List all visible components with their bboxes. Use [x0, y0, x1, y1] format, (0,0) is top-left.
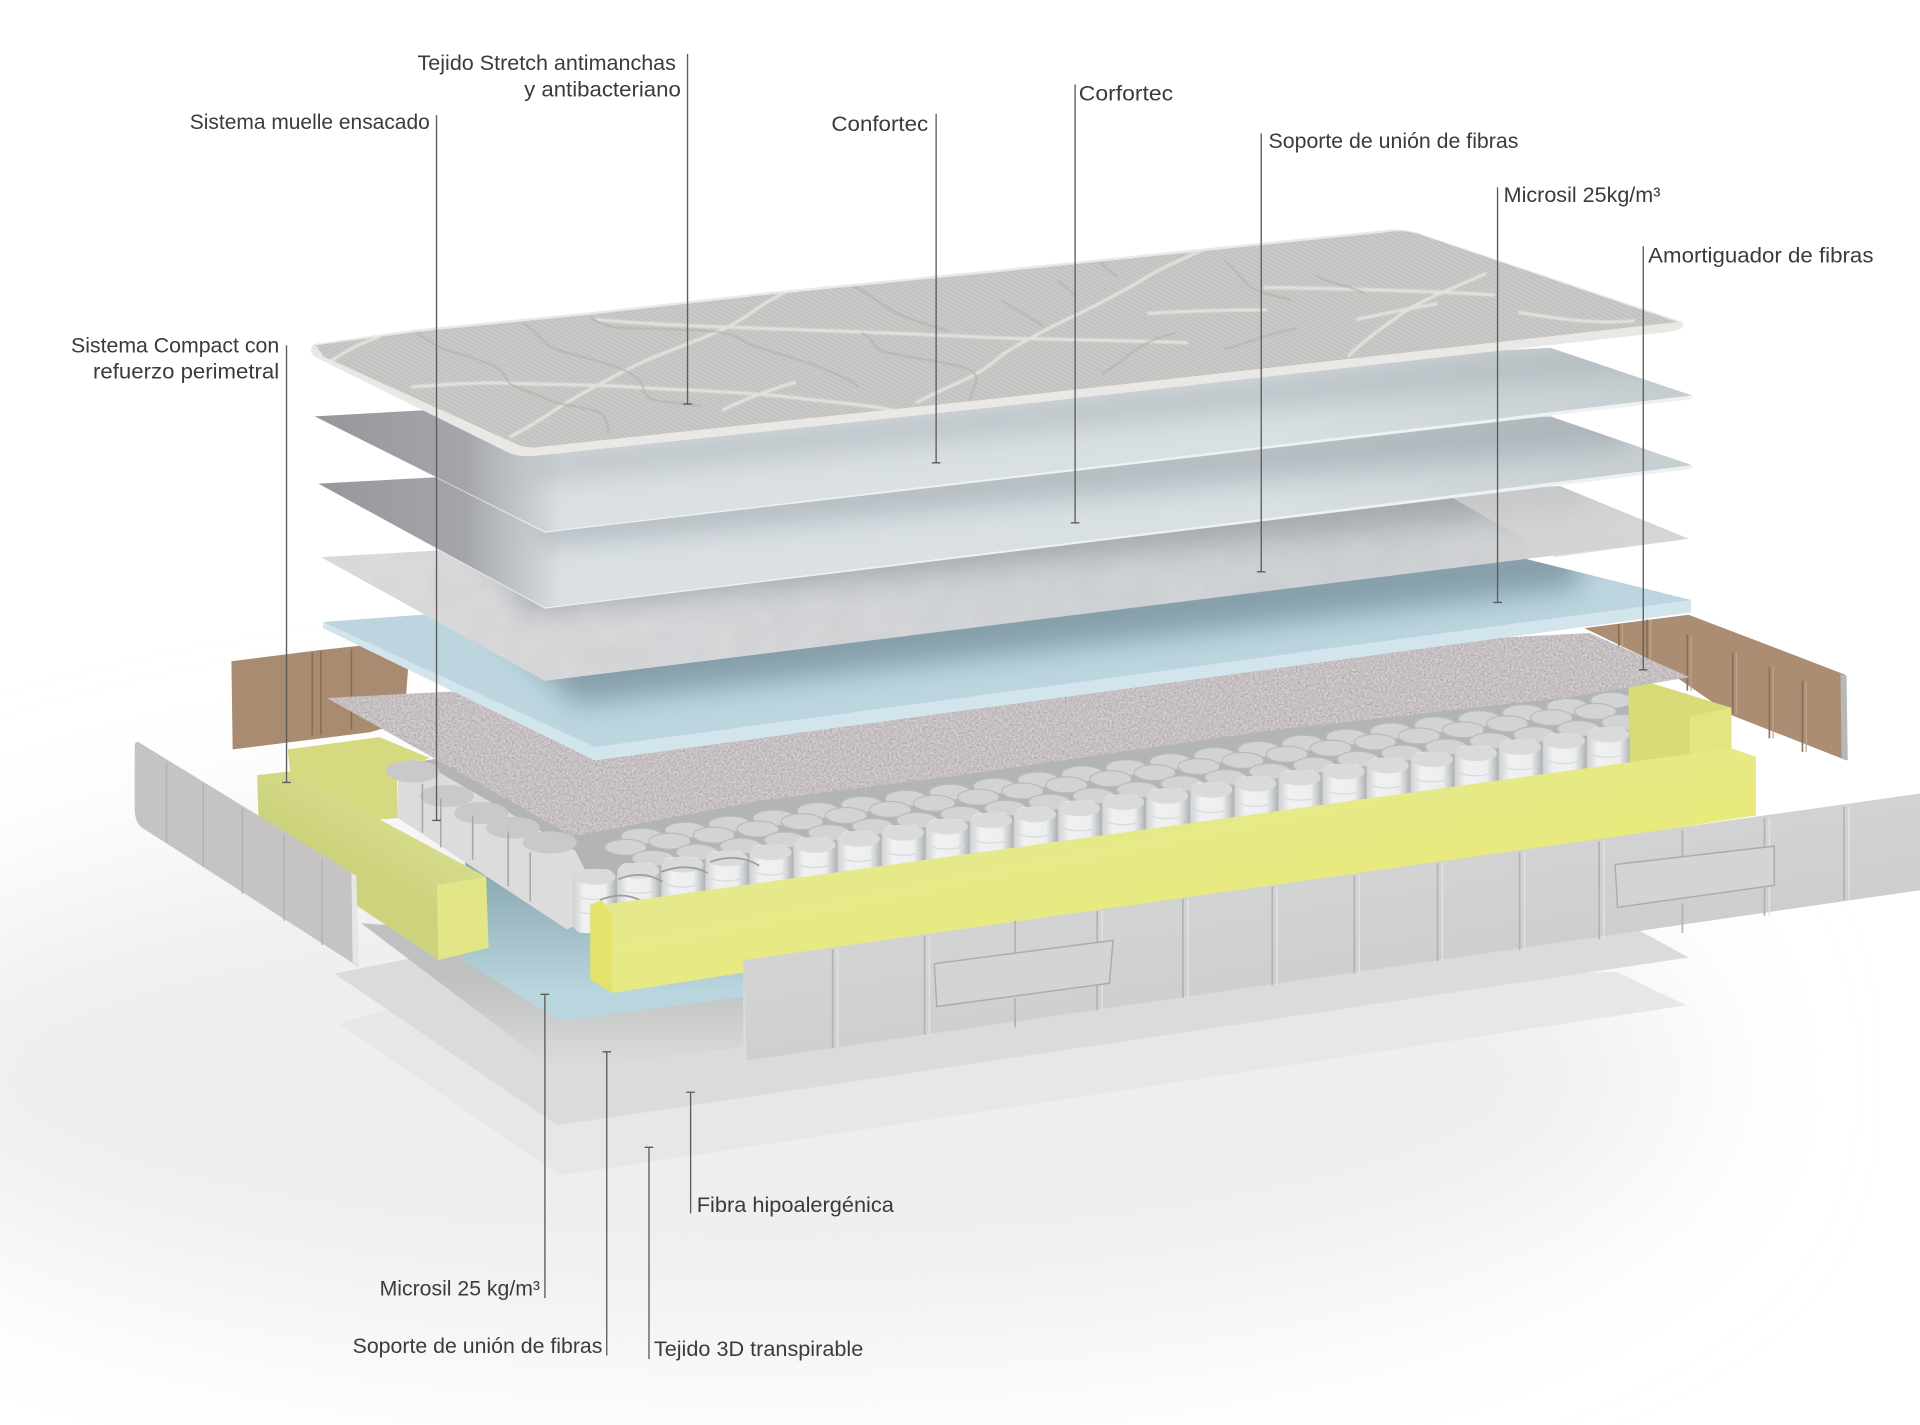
left grey side band: [135, 742, 359, 966]
label: Microsil 25kg/m3 (upper): [1493, 184, 1660, 602]
label: Soporte de unión de fibras (lower): Soporte de unión de fibras: [353, 1335, 602, 1358]
label: Confortec: Confortec: [831, 113, 928, 136]
fabric quilting pattern: [331, 249, 1635, 437]
spring base: [398, 686, 1629, 931]
layer: Tejido 3D transpirable: [339, 972, 1686, 1176]
background floor shadow: [0, 802, 1690, 1353]
label: Microsil 25kg/m3 (upper): Microsil 25kg/m³: [1504, 184, 1660, 207]
label: Tejido 3D transpirable: Tejido 3D transpirable: [654, 1338, 863, 1361]
layer: Confortec: [315, 333, 1692, 533]
label: Sistema Compact con refuerzo perimetral: Sistema Compact con: [71, 335, 279, 358]
label: Tejido Stretch antimanchas y antibacteriano: Tejido Stretch antimanchas: [418, 52, 676, 75]
layer: Amortiguador de fibras: [327, 633, 1690, 836]
label: Soporte de unión de fibras (lower): [353, 1052, 611, 1358]
layer: Tejido Stretch top fabric: [311, 230, 1683, 456]
front row springs: [573, 727, 1630, 933]
right brown side panel: [1584, 615, 1848, 760]
left yellow foam bar: [257, 771, 489, 960]
label: Fibra hipoalergénica: Fibra hipoalergénica: [697, 1194, 894, 1217]
label: Microsil 25 kg/m3 (lower): [380, 994, 549, 1301]
label: Fibra hipoalergénica: [686, 1092, 894, 1217]
layer: lower Soporte de unión de fibras: [361, 923, 743, 1071]
label: Corfortec: Corfortec: [1079, 82, 1173, 105]
yellow back corner left: [288, 737, 430, 820]
label: Tejido Stretch antimanchas y antibacteriano: y antibacteriano: [524, 79, 681, 102]
label: Corfortec: [1071, 82, 1173, 523]
side row springs: [386, 759, 606, 929]
label: Microsil 25 kg/m3 (lower): Microsil 25 kg/m³: [380, 1278, 540, 1301]
pocket springs block: [386, 686, 1643, 933]
label: Sistema muelle ensacado: [190, 111, 441, 820]
label: Sistema Compact con refuerzo perimetral: refuerzo perimetral: [93, 360, 279, 383]
left brown side panel: [231, 640, 410, 749]
handle right: [1615, 846, 1774, 907]
yellow back corner right: [1566, 683, 1731, 765]
label: Soporte de unión de fibras (upper): Soporte de unión de fibras: [1269, 130, 1518, 153]
label: Amortiguador de fibras: Amortiguador de fibras: [1648, 245, 1873, 268]
front grey band with handles: [743, 793, 1920, 1060]
layer: Corfortec: [318, 416, 1692, 608]
spring top rows: [605, 692, 1643, 866]
layer: upper Microsil 25kg/m3: [323, 559, 1691, 760]
layer: upper Soporte de unión de fibras: [321, 486, 1688, 681]
label: Tejido 3D transpirable: [645, 1147, 863, 1361]
exposed coils: [600, 858, 759, 902]
layer: Fibra hipoalergénica: [334, 931, 1689, 1125]
label: Soporte de unión de fibras (upper): [1257, 130, 1518, 572]
soporte lighter right patch: [1445, 486, 1689, 557]
label: Sistema Compact con refuerzo perimetral: [71, 335, 291, 782]
label: Amortiguador de fibras: [1639, 245, 1873, 670]
layer: lower Microsil 25 kg/m3: [463, 857, 743, 1021]
label: Tejido Stretch antimanchas y antibacteriano: [418, 52, 692, 404]
handle left: [934, 940, 1113, 1007]
front yellow foam bar: [590, 748, 1756, 993]
label: Confortec: [831, 113, 940, 463]
label: Sistema muelle ensacado: Sistema muelle ensacado: [190, 111, 430, 134]
